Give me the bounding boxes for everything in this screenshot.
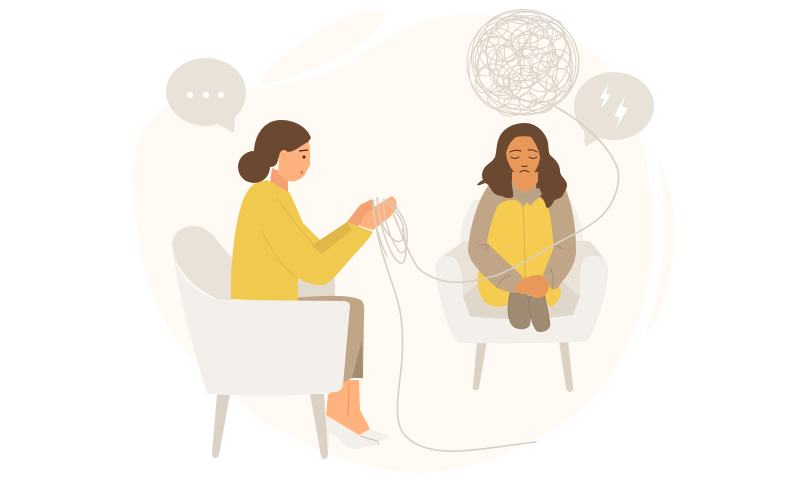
bun [238,151,270,183]
patient armchair [436,200,608,392]
legs [326,380,370,435]
face [278,138,310,181]
front hand [360,196,397,230]
rear shoe [349,417,390,441]
chair legs [472,341,573,392]
therapist armchair body [172,245,350,459]
jacket [468,180,576,294]
tangled thread [373,107,618,451]
chair front [172,245,350,396]
collar [513,188,542,206]
background blob [133,11,675,473]
hair [477,123,567,208]
knees yellow [477,198,561,307]
hands [515,275,549,298]
facial features [299,150,308,151]
neck [512,172,538,191]
sweater [231,180,373,301]
front shoe [326,415,378,449]
socks [508,293,550,332]
hair [254,120,311,172]
rear hand [347,199,376,231]
jacket forearms [468,235,576,294]
therapist woman [231,120,407,449]
facial features [510,150,537,172]
speech bubble: lightning [574,72,654,147]
sweater creases [262,198,322,278]
thread from thought ball to hands [393,107,618,282]
chair back [460,200,584,245]
rear sleeve shade [312,222,352,254]
speech bubble: dots [166,58,246,133]
chair back cushion [172,226,232,300]
chair inner [440,241,604,320]
neck [270,168,288,192]
thought scribble ball [453,0,596,134]
sleeve creases [478,245,562,288]
patient woman [468,123,576,332]
yarn in hands [373,197,407,263]
trousers [268,296,364,392]
chair seat shadow [463,279,580,319]
ear [279,150,289,164]
knee divider [523,208,525,278]
seat cushion [296,278,335,300]
face [506,136,540,177]
chair legs [212,394,328,459]
therapist armchair back [172,226,335,300]
chair body [436,256,608,343]
thread trailing to floor [373,205,536,451]
